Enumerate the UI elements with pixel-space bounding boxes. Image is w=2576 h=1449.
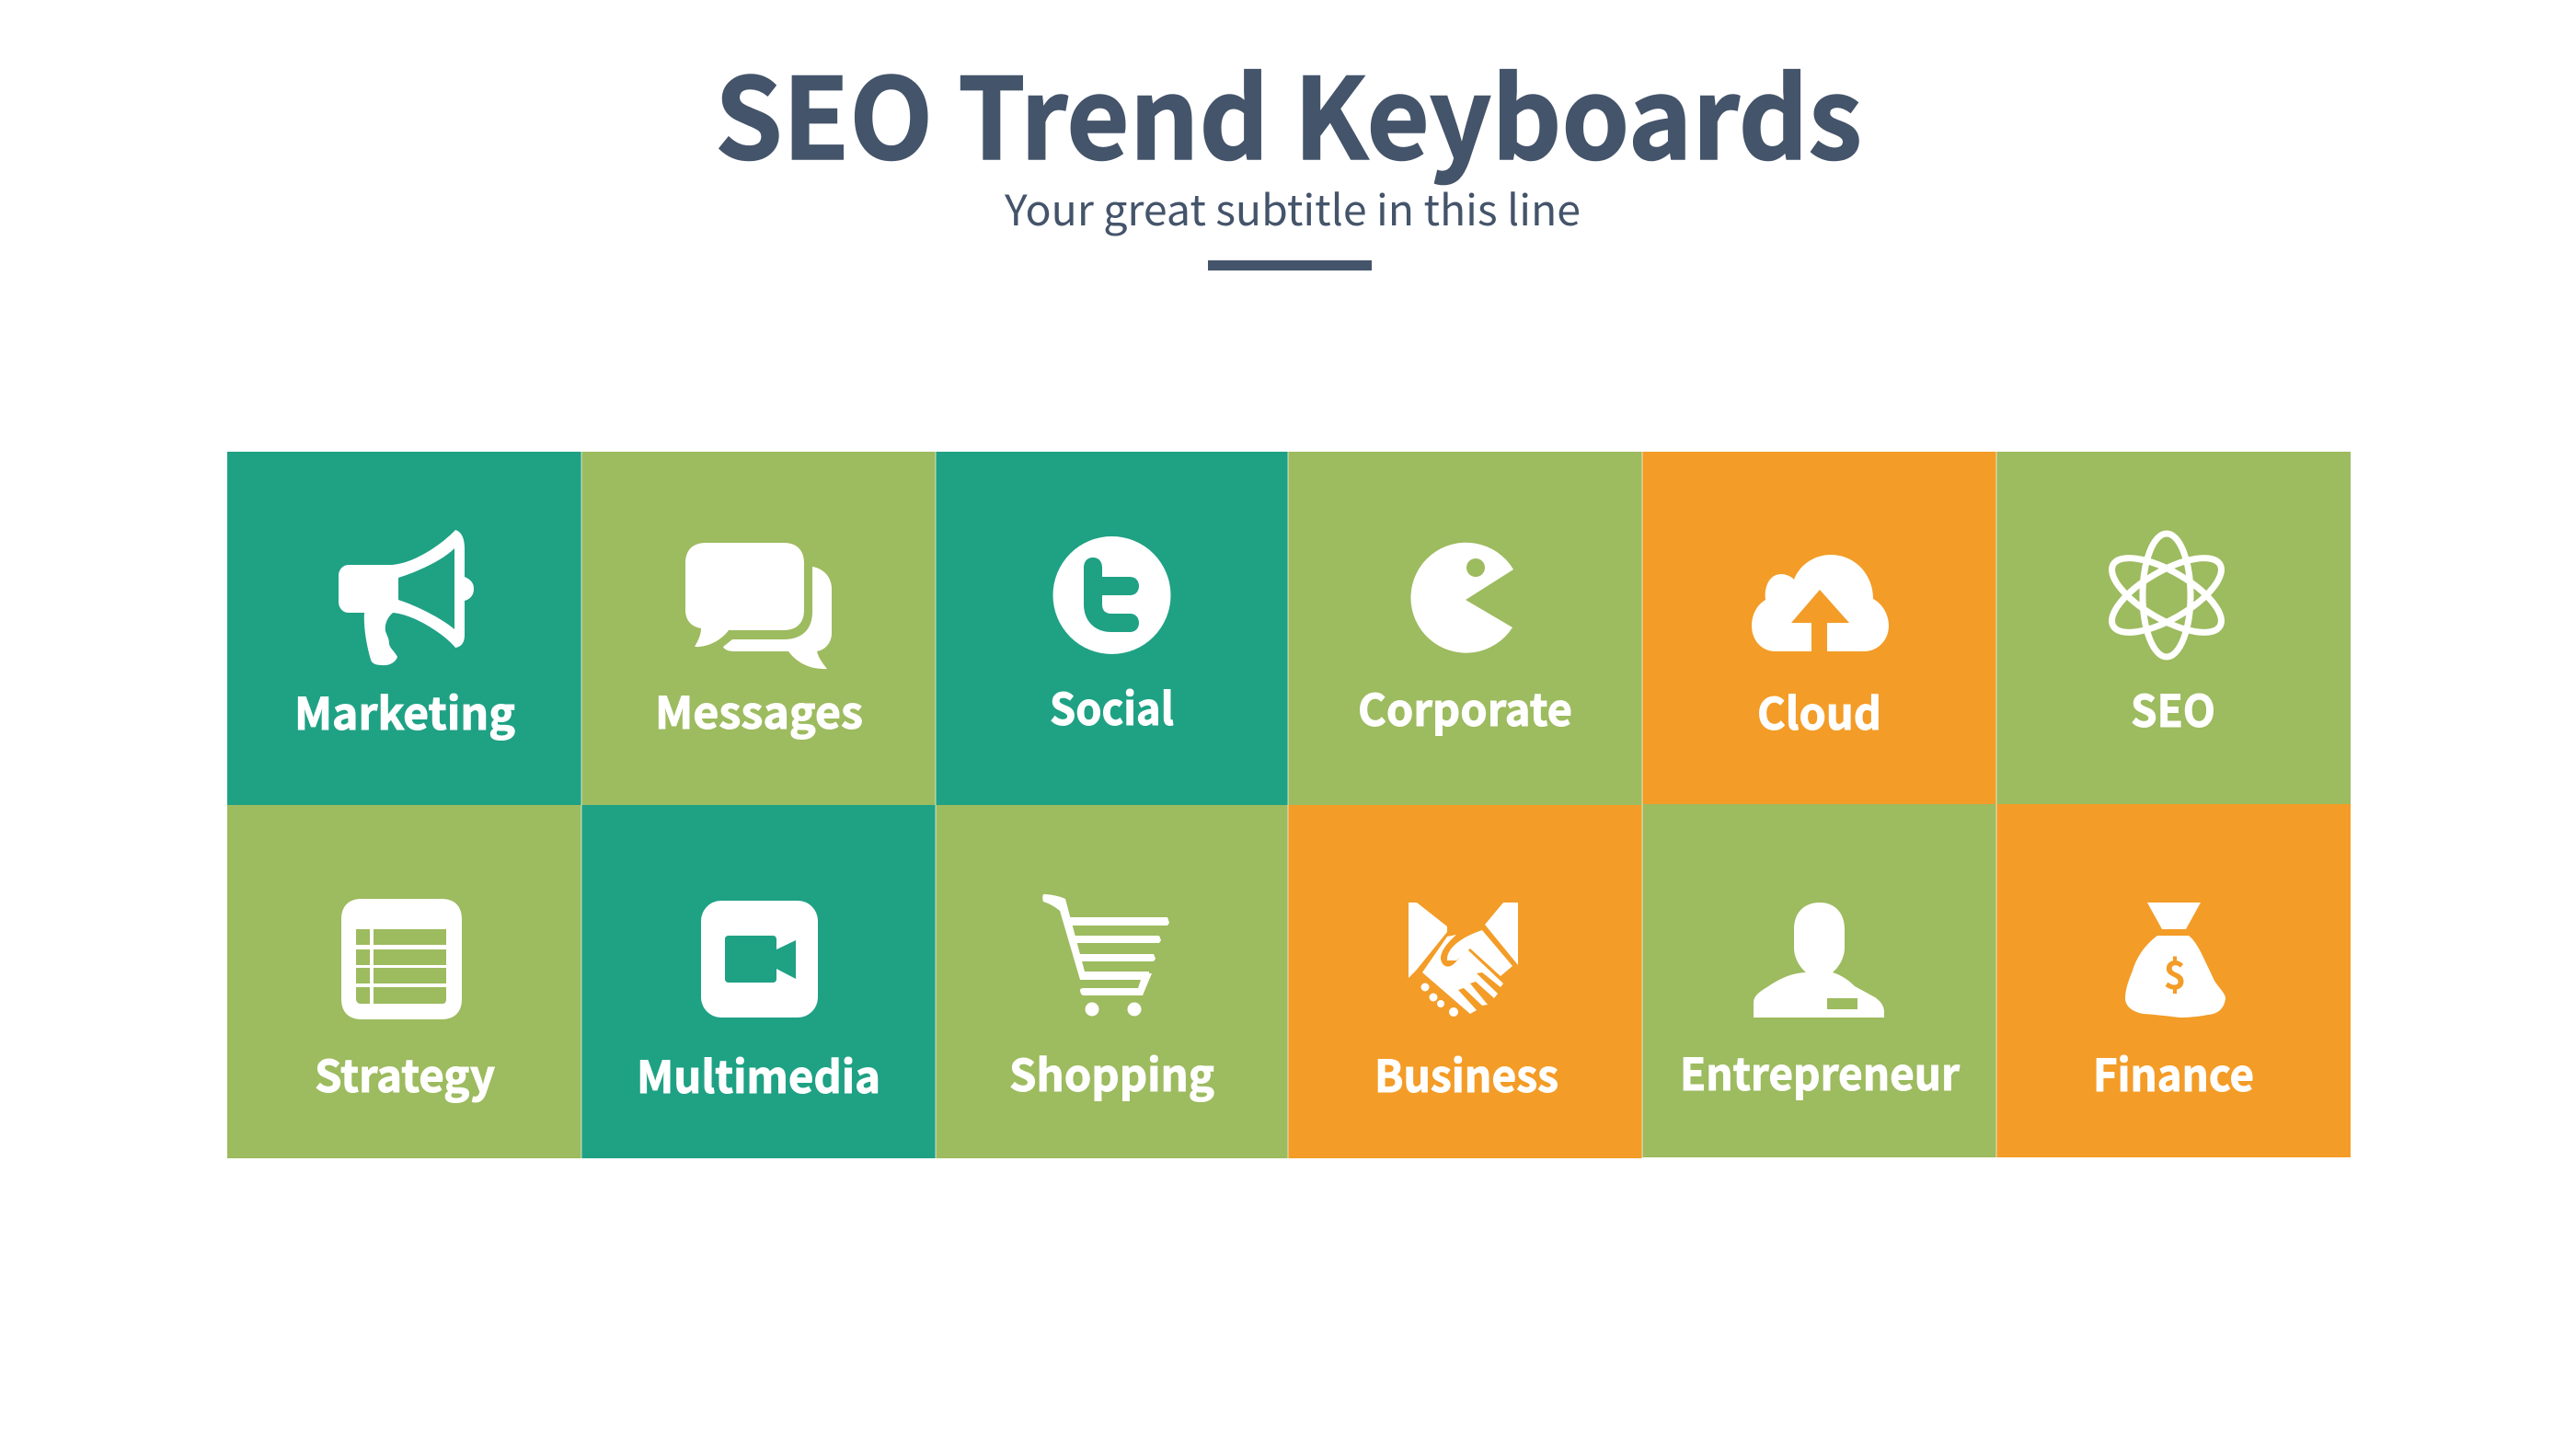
label: Cloud: Cloud — [1757, 678, 1881, 742]
label: Marketing: Marketing — [294, 678, 515, 742]
panel: Marketing — [227, 452, 581, 805]
panel: Cloud — [1642, 452, 1996, 804]
panel: Messages — [581, 452, 936, 805]
icon: cloud upload — [1752, 555, 1889, 651]
label: Finance: Finance — [2093, 1040, 2254, 1104]
icon: money bag: $ — [2164, 945, 2186, 1001]
panel: Entrepreneur — [1642, 804, 1996, 1157]
panel: Finance — [1996, 804, 2351, 1157]
icon: money bag — [2125, 903, 2225, 1018]
panel: Social — [936, 452, 1288, 805]
label: Corporate: Corporate — [1358, 674, 1572, 739]
icon: megaphone — [339, 530, 474, 665]
icon: atom — [2101, 534, 2232, 657]
title: SEO Trend Keyboards — [715, 29, 1862, 192]
label: Entrepreneur: Entrepreneur — [1680, 1039, 1960, 1103]
icon: table — [341, 899, 462, 1019]
icon: shopping cart — [1042, 894, 1169, 1016]
panel: Multimedia — [581, 805, 936, 1158]
icon: handshake — [1409, 903, 1518, 1017]
label: Strategy: Strategy — [315, 1041, 495, 1105]
label: Messages: Messages — [655, 677, 863, 742]
panel: SEO — [1996, 452, 2351, 804]
icon: person with name tag — [1754, 903, 1884, 1018]
label: Business: Business — [1374, 1041, 1558, 1105]
label: Shopping: Shopping — [1009, 1040, 1214, 1104]
icon: video camera — [701, 901, 818, 1018]
label: Social: Social — [1050, 673, 1174, 738]
icon: twitter badge — [1052, 536, 1170, 654]
label: Multimedia: Multimedia — [637, 1041, 880, 1106]
title divider — [1208, 260, 1372, 270]
panel: Strategy — [227, 805, 581, 1158]
subtitle: Your great subtitle in this line — [1004, 178, 1581, 238]
panel: Corporate — [1288, 452, 1642, 805]
panel: Shopping — [936, 805, 1288, 1158]
panel: Business — [1288, 805, 1642, 1158]
label: SEO: SEO — [2131, 675, 2215, 740]
icon: pacman — [1410, 543, 1513, 653]
icon: speech bubbles — [685, 543, 832, 669]
